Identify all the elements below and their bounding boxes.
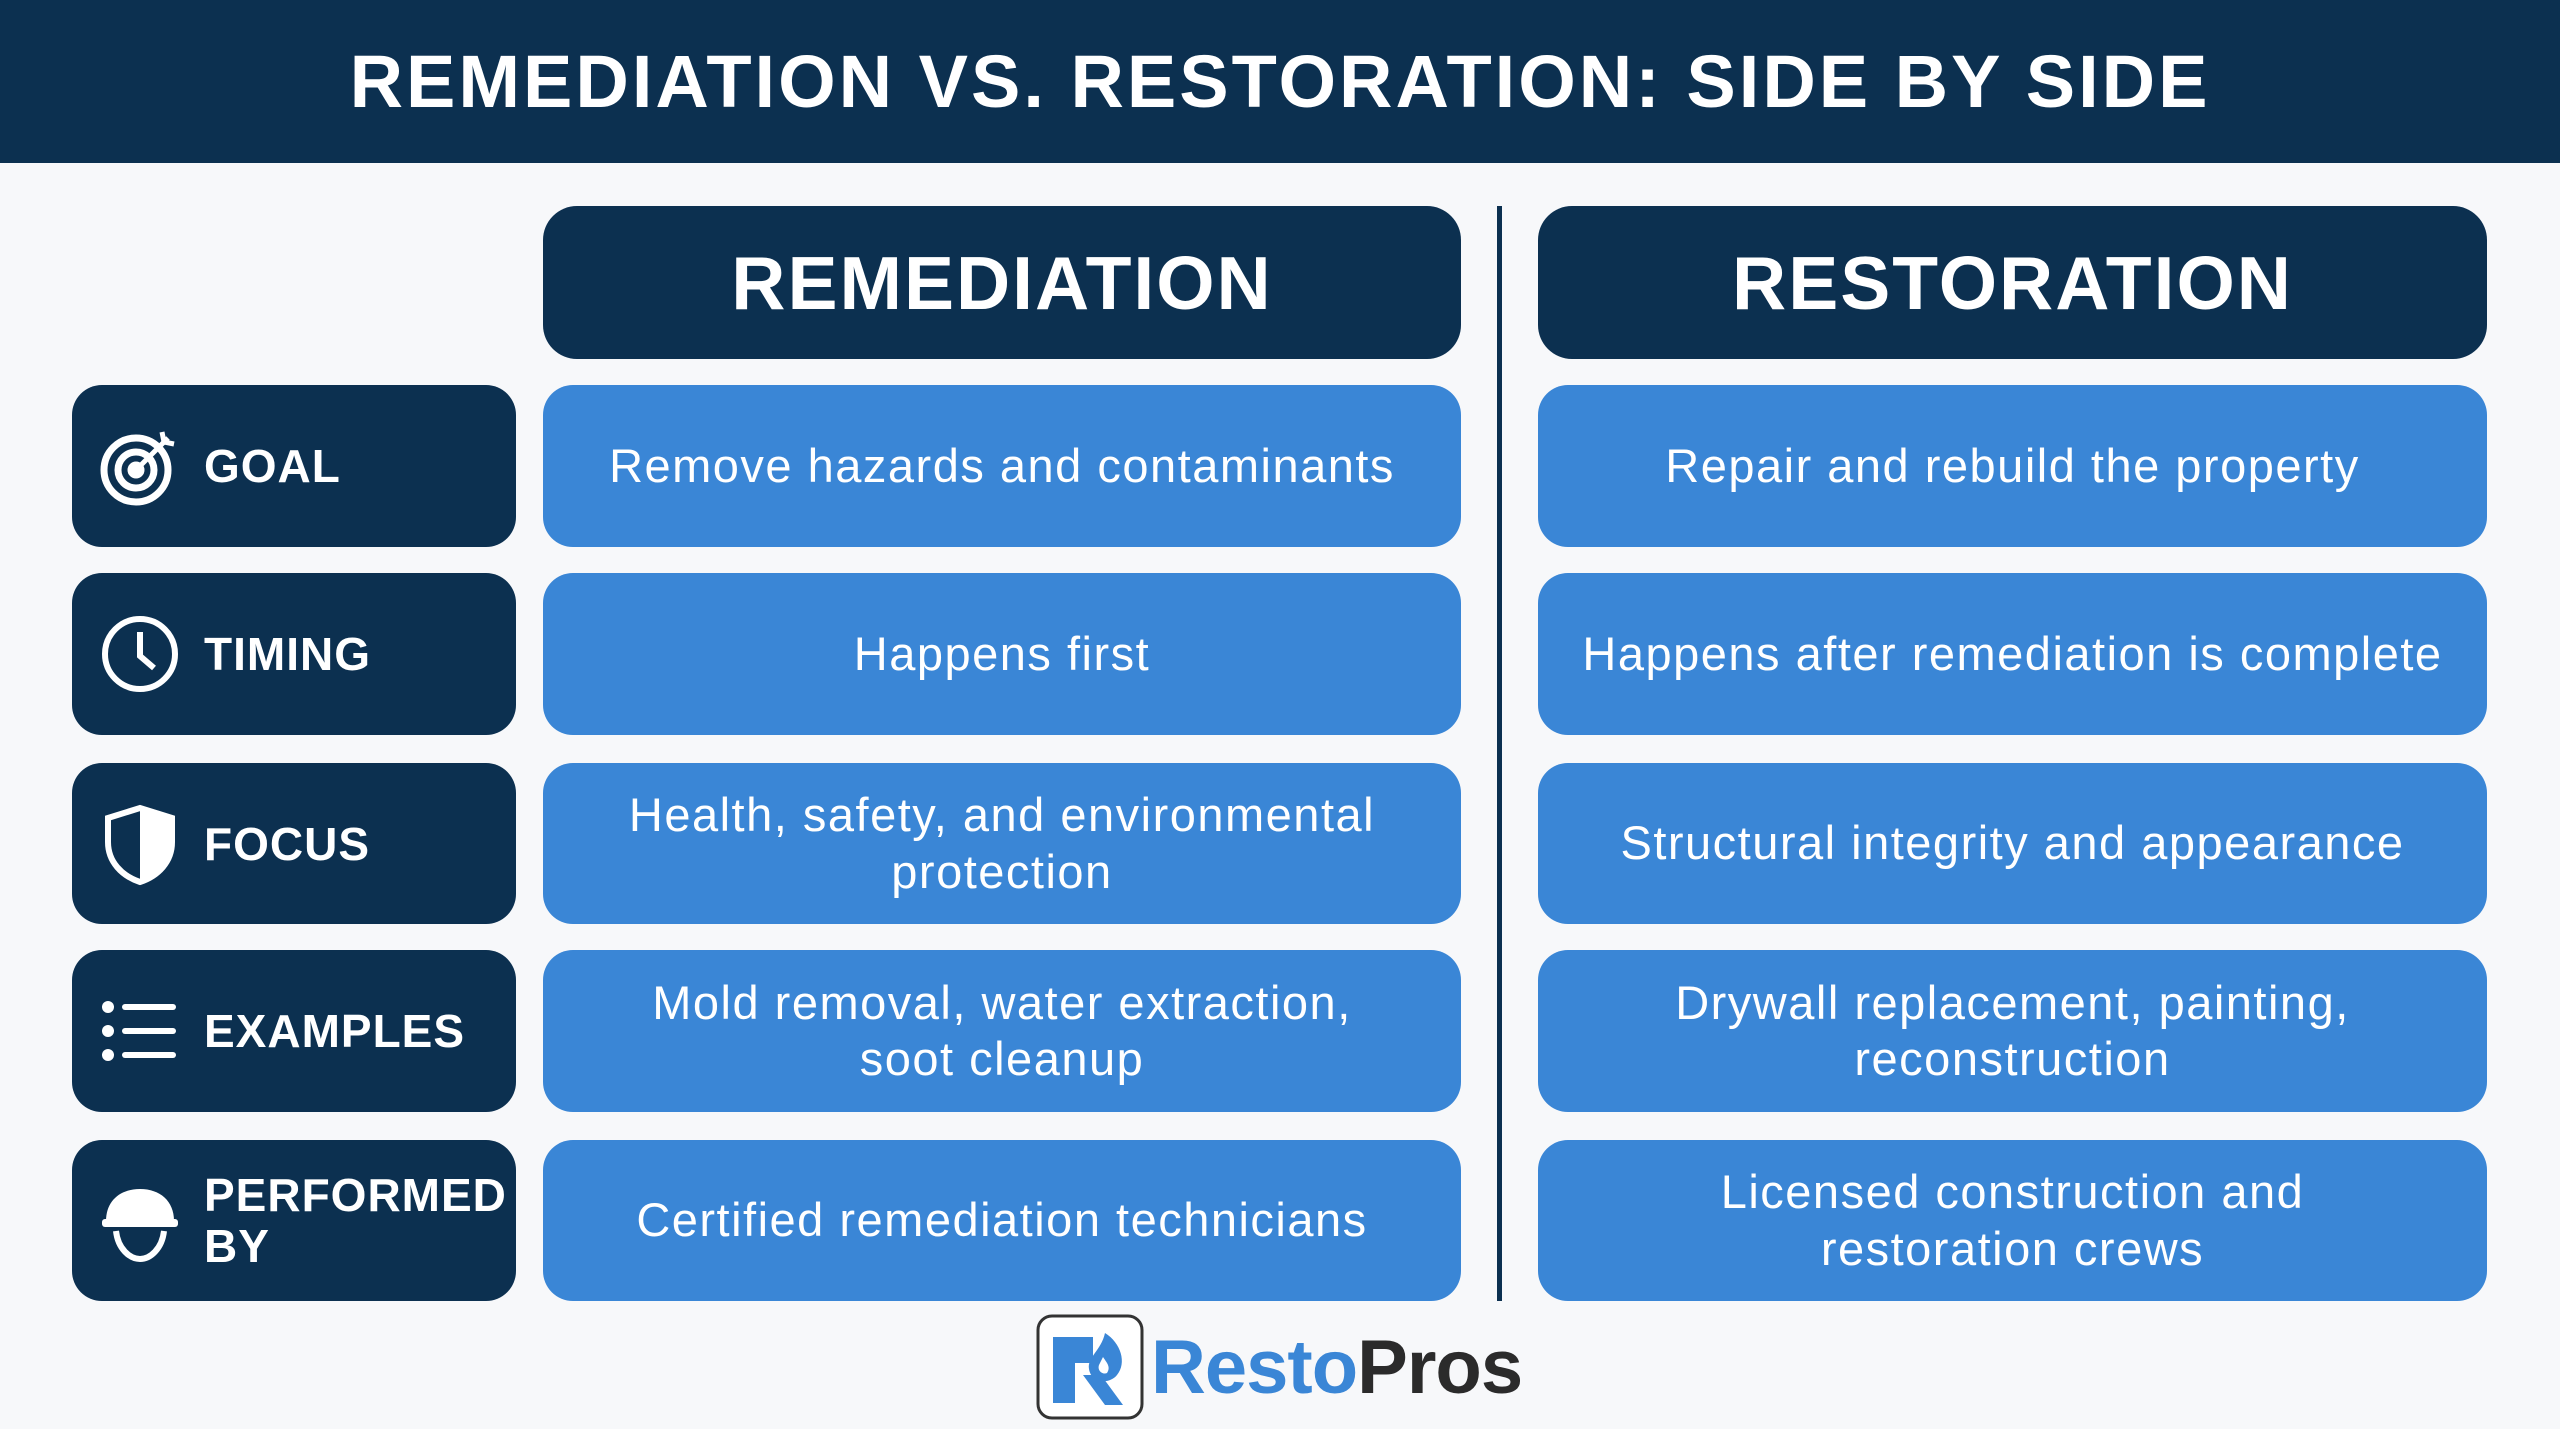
label: timing: TIMING [204,628,371,680]
cell: remediation timing: Happens first [854,627,1150,680]
cell: restoration performed by: restoration crews [1821,1222,2204,1274]
icon: shield [105,804,175,886]
cell: restoration focus [1538,763,2487,924]
cell: restoration performed by: Licensed construction and [1721,1165,2304,1218]
cell: remediation goal [543,385,1461,547]
icon: hard hat [102,1189,178,1262]
label: examples: EXAMPLES [204,1005,465,1057]
icon: list [102,1001,176,1061]
header: remediation [543,206,1461,359]
cell: restoration examples [1538,950,2487,1112]
header: restoration [1538,206,2487,359]
icon: target [100,432,174,506]
cell: remediation focus: Health, safety, and environmental [629,788,1375,841]
label: examples [72,950,516,1112]
cell: remediation performed by: Certified remediation technicians [636,1193,1368,1246]
cell: remediation examples: Mold removal, water extraction, [652,976,1352,1029]
label: performed by: PERFORMED [204,1169,507,1221]
label: focus: FOCUS [204,818,370,870]
cell: restoration focus: Structural integrity and appearance [1620,816,2405,869]
label: focus [72,763,516,924]
label: goal [72,385,516,547]
label: timing [72,573,516,735]
cell: remediation focus: protection [891,844,1113,898]
title bar [0,0,2560,163]
label: performed by [72,1140,516,1301]
cell: remediation timing [543,573,1461,735]
label: goal: GOAL [204,440,341,492]
header: restoration: RESTORATION [1732,240,2293,324]
cell: remediation goal: Remove hazards and contaminants [609,439,1395,492]
cell: restoration examples: reconstruction [1854,1032,2171,1085]
icon: logo mark [1036,1314,1144,1420]
cell: restoration timing [1538,573,2487,735]
cell: restoration timing: Happens after remediation is complete [1582,627,2443,680]
cell: remediation examples: soot cleanup [860,1032,1144,1085]
cell: remediation focus [543,763,1461,924]
cell: remediation examples [543,950,1461,1112]
cell: remediation performed by [543,1140,1461,1301]
logo: RestoPros [1151,1324,1522,1410]
cell: restoration performed by [1538,1140,2487,1301]
divider [1497,206,1502,1301]
header: remediation: REMEDIATION [731,240,1273,324]
cell: restoration examples: Drywall replacement, painting, [1675,976,2350,1029]
label: performed by: BY [204,1220,270,1272]
icon: clock [102,616,178,692]
title bar: REMEDIATION VS. RESTORATION: SIDE BY SIDE [350,40,2210,123]
cell: restoration goal [1538,385,2487,547]
cell: restoration goal: Repair and rebuild the property [1665,439,2360,492]
logo [1036,1314,1522,1420]
